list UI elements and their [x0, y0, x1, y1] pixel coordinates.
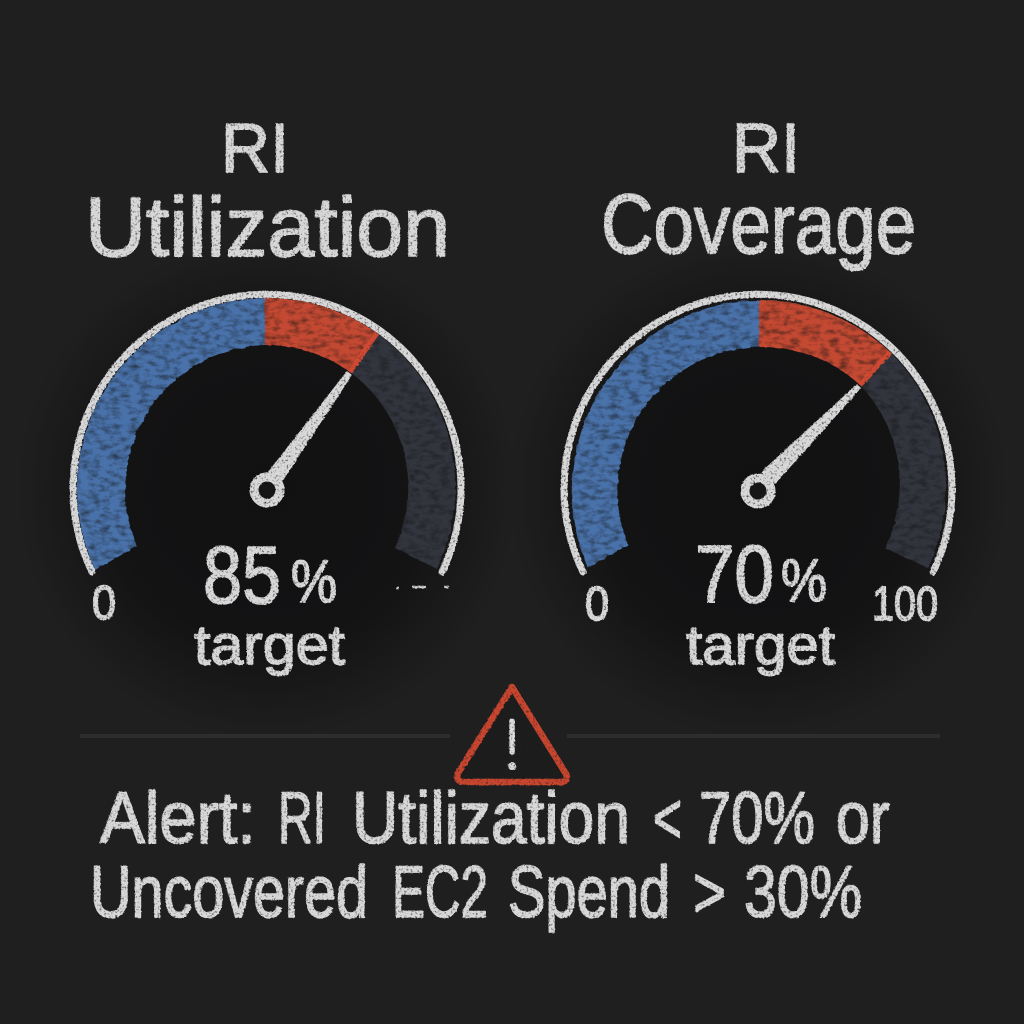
alert line 1 [100, 778, 890, 859]
alert line 2: Spend [508, 852, 670, 933]
gauge dial: utilization [73, 294, 461, 572]
alert line 2: Uncovered [90, 852, 368, 933]
alert line 1: 70% [699, 778, 815, 859]
heading: RI Coverage: RI [732, 109, 800, 187]
heading: RI Utilization: Utilization [85, 180, 450, 274]
scale labels and target value: % [291, 548, 337, 615]
red boundary edge [860, 352, 890, 385]
scale minimum: 0 [585, 578, 609, 631]
dark segment [860, 352, 946, 568]
alert line 1: Alert: [100, 778, 256, 859]
target label: target [194, 613, 345, 676]
gauge: RI Coverage [564, 109, 952, 676]
alert line 2: > [693, 853, 726, 933]
heading: RI Coverage [601, 109, 916, 271]
red segment [265, 298, 377, 372]
dark segment [350, 333, 455, 569]
clipped scale maximum marks [396, 587, 449, 588]
alert line 2: EC2 [392, 852, 488, 933]
heading: RI Coverage: Coverage [601, 177, 916, 271]
alert line 1: RI [278, 778, 326, 859]
gauge bands: coverage [572, 300, 946, 568]
alert line 2: 30% [744, 852, 862, 933]
scale labels and target value [585, 529, 938, 676]
gauge: RI Utilization [73, 109, 461, 676]
outer arc [564, 294, 952, 572]
gauge dial: coverage [564, 294, 952, 572]
red boundary edge [350, 333, 377, 372]
alert line 2 [90, 852, 862, 933]
needle hub [745, 478, 771, 504]
blue segment [77, 298, 265, 570]
alert text [90, 778, 890, 933]
scale labels and target value [92, 530, 449, 676]
alert line 1: or [836, 778, 890, 859]
target value: 85 [203, 530, 281, 621]
outer arc [73, 294, 461, 572]
heading: RI Utilization [85, 109, 450, 274]
heading: RI Utilization: RI [221, 109, 289, 187]
target value: 70 [695, 529, 774, 620]
needle [761, 384, 861, 484]
alert line 1: < [653, 779, 682, 859]
red segment [759, 300, 890, 385]
icon: warning triangle [457, 687, 567, 782]
needle [268, 371, 352, 482]
gauge bands: utilization [77, 298, 455, 570]
alert line 1: Utilization [352, 778, 630, 859]
scale labels and target value: % [781, 547, 827, 614]
scale maximum: 100 [872, 578, 938, 631]
blue segment [572, 300, 759, 568]
scale minimum: 0 [92, 577, 116, 630]
needle hub [254, 477, 280, 503]
divider line [80, 734, 940, 738]
target label: target [686, 613, 835, 676]
